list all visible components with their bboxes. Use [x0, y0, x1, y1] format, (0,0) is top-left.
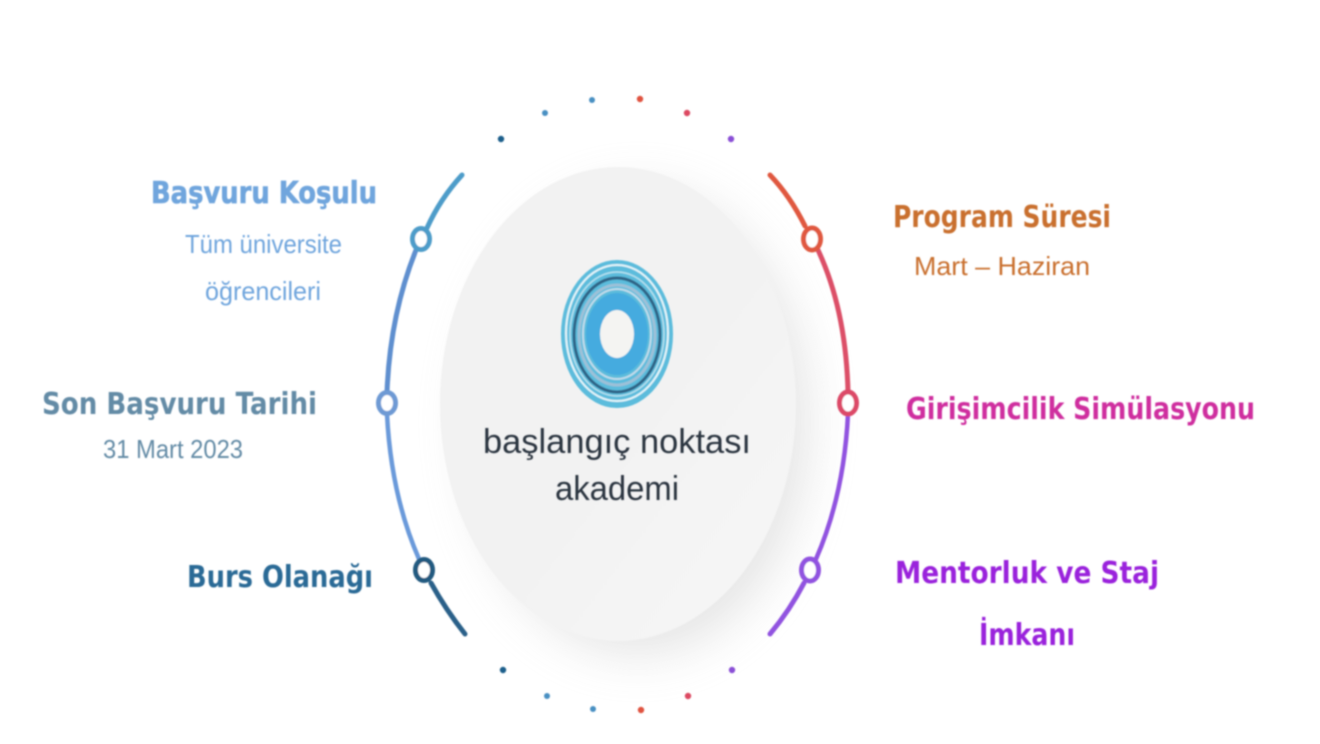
text: Mentorluk ve Staj İmkanı: İmkanı	[979, 617, 1075, 653]
text: Son Başvuru Tarihi: Son Başvuru Tarihi	[42, 387, 317, 422]
right arc	[770, 175, 856, 634]
text: Mentorluk ve Staj İmkanı: Mentorluk ve Staj	[895, 556, 1159, 591]
top dots	[498, 96, 734, 142]
text: Başvuru Koşulu: Tüm üniversite	[185, 229, 342, 259]
central disc	[440, 167, 808, 654]
text: Burs Olanağı: Burs Olanağı	[187, 560, 373, 595]
logo text	[483, 423, 751, 508]
text: Son Başvuru Tarihi: 31 Mart 2023	[103, 434, 243, 464]
logo rings	[561, 260, 673, 408]
text: Program Süresi: Program Süresi	[893, 200, 1111, 235]
node: Mentorluk ve Staj	[802, 559, 818, 581]
text: Girişimcilik Simülasyonu: Girişimcilik Simülasyonu	[906, 392, 1255, 427]
node: Son Başvuru Tarihi	[378, 392, 396, 414]
node: Girişimcilik Simülasyonu	[840, 392, 856, 414]
left arc	[378, 175, 465, 634]
text: Son Başvuru Tarihi	[42, 387, 317, 464]
node: Burs Olanağı	[416, 560, 432, 580]
text: Program Süresi: Mart – Haziran	[914, 251, 1090, 281]
text: Mentorluk ve Staj İmkanı	[895, 556, 1159, 653]
text: Program Süresi	[893, 200, 1111, 281]
text: Başvuru Koşulu: öğrencileri	[205, 276, 321, 306]
text: Başvuru Koşulu	[151, 176, 377, 306]
node: Program Süresi	[804, 228, 820, 250]
bottom dots	[500, 667, 735, 713]
node: Başvuru Koşulu	[412, 228, 430, 250]
text: Başvuru Koşulu: Başvuru Koşulu	[151, 176, 377, 211]
logo text: başlangıç noktası	[483, 423, 751, 461]
logo text: akademi	[555, 470, 679, 508]
